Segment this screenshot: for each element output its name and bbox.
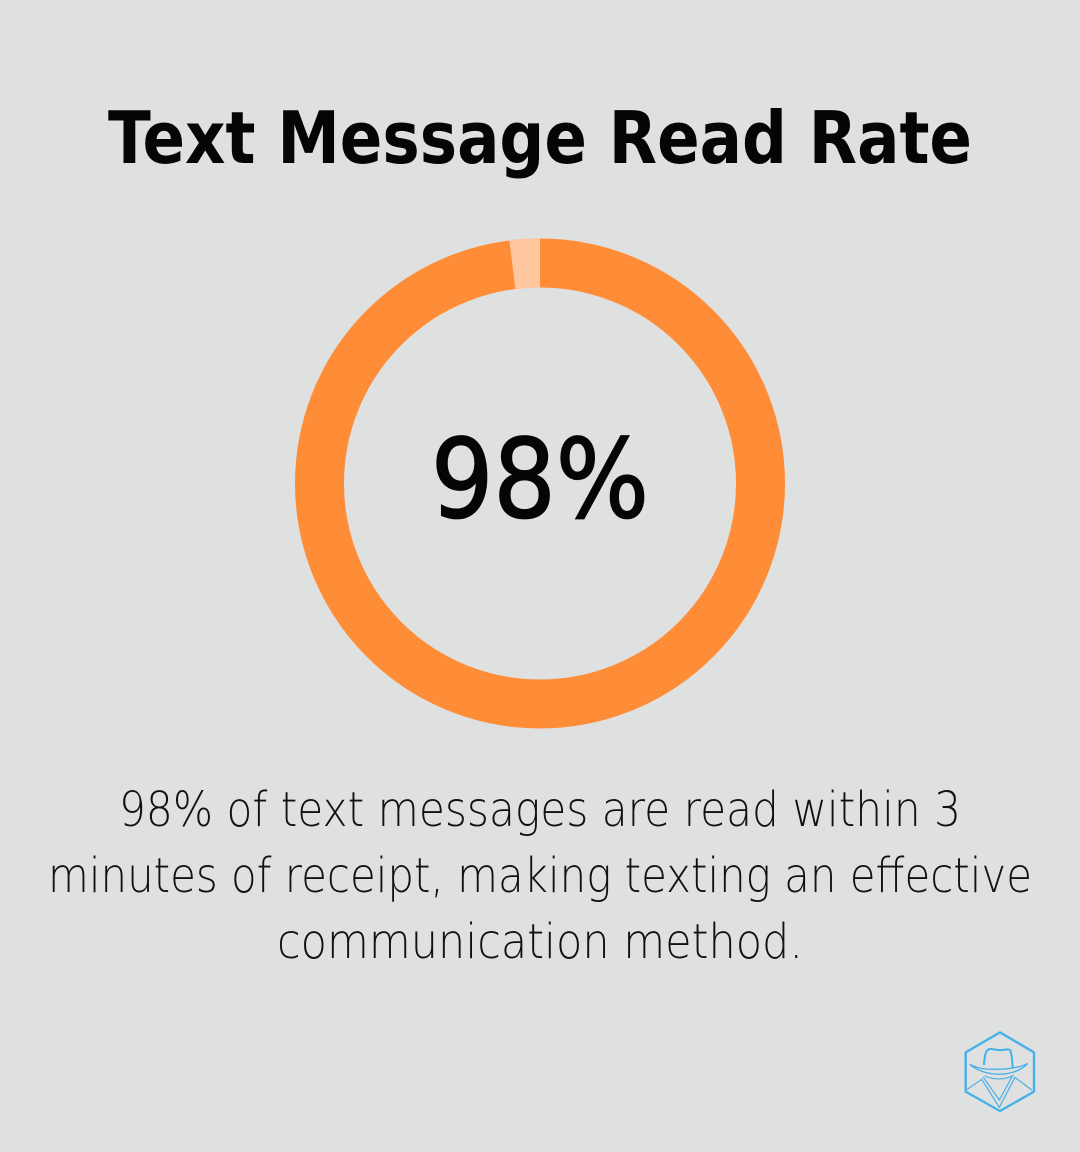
description text: 98% of text messages are read within 3 — [119, 782, 961, 838]
hat brim — [970, 1064, 1027, 1074]
icon: hexagon spy logo — [966, 1032, 1034, 1111]
description text: communication method. — [277, 914, 803, 970]
coat collar — [967, 1075, 1032, 1107]
donut segment: remaining 2% — [509, 238, 540, 289]
description text — [48, 782, 1032, 970]
title: Text Message Read Rate — [108, 96, 972, 180]
donut track: main 98% segment — [320, 263, 760, 704]
hexagon outline — [966, 1032, 1034, 1111]
donut chart: 98% read rate — [320, 238, 760, 704]
donut centre value: 98% — [431, 416, 649, 543]
hat crown — [984, 1049, 1013, 1067]
